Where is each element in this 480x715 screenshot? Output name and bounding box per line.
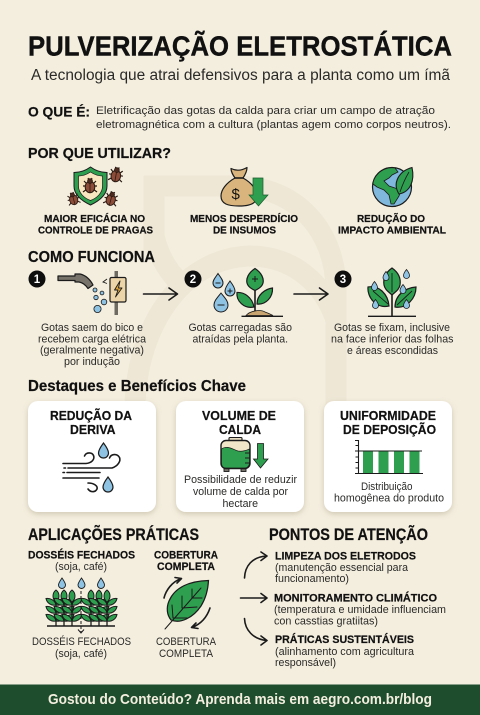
panel: redução da deriva [28, 401, 156, 512]
application: cobertura completa [154, 550, 218, 660]
caption: atraídas pela planta. [192, 334, 288, 346]
icon: globe with leaf [372, 168, 413, 206]
number badge: 2 [190, 274, 196, 286]
card text: Possibilidade de reduzir [184, 474, 297, 486]
card text: volume de calda por [193, 486, 288, 498]
subheading: COMPLETA [157, 561, 215, 573]
label: CONTROLE DE PRAGAS [38, 226, 153, 236]
label: MAIOR EFICÁCIA NO [44, 212, 145, 225]
card title: REDUÇÃO DA [50, 408, 133, 423]
benefit: ambiental [338, 168, 447, 236]
icon: charged drops and plant [213, 268, 283, 316]
card [324, 401, 452, 512]
caption: COBERTURA [156, 636, 217, 648]
subheading [28, 549, 135, 573]
definition text: eletromagnética com a cultura (plantas agem como corpos neutros). [96, 119, 451, 131]
label: IMPACTO AMBIENTAL [338, 226, 447, 236]
watermark logo [135, 186, 336, 430]
card [176, 401, 304, 512]
card [28, 401, 156, 512]
heading: como funciona: COMO FUNCIONA [28, 249, 155, 266]
definition text [96, 105, 451, 131]
arrow: to práticas [244, 618, 267, 645]
number badge: 3 [340, 274, 346, 286]
caption: recebem carga elétrica [38, 334, 146, 346]
icon: leaf with rotating arrows [164, 578, 210, 629]
caption: COMPLETA [159, 648, 214, 660]
card title [340, 408, 436, 437]
card text: hectare [222, 498, 258, 510]
caption: na face inferior das folhas [331, 334, 454, 346]
caption: Gotas se fixam, inclusive [334, 322, 450, 334]
caption: Gotas carregadas são [188, 322, 292, 334]
label: MENOS DESPERDÍCIO [190, 212, 298, 225]
icon: plant with fixed drops [368, 268, 416, 316]
caption [32, 635, 131, 660]
card title: DERIVA [70, 422, 116, 437]
number badge: 1 [34, 274, 41, 286]
benefit: pragas [38, 166, 153, 236]
icon: crop canopy with drops [46, 578, 117, 633]
point: práticas: PRÁTICAS SUSTENTÁVEIS [275, 633, 414, 646]
card title: UNIFORMIDADE [340, 408, 436, 423]
footer text: Gostou do Conteúdo? Aprenda mais em aegro.com.br/blog [48, 691, 432, 708]
card title: VOLUME DE [202, 408, 276, 423]
subheading: COBERTURA [154, 550, 218, 562]
application: dosséis fechados [28, 549, 135, 660]
icon: money bag with arrow: $ [232, 186, 240, 203]
label [338, 212, 447, 236]
point: limpeza [275, 550, 416, 585]
label: DE INSUMOS [213, 226, 276, 236]
point: monitoramento: con casstias gratiitas) [274, 616, 378, 628]
section: o que é [28, 104, 451, 131]
heading: destaques: Destaques e Benefícios Chave [28, 378, 246, 395]
caption [38, 322, 146, 368]
subheading [154, 550, 218, 573]
label: REDUÇÃO DO [357, 212, 425, 225]
card title: CALDA [219, 422, 262, 437]
heading: por que utilizar: POR QUE UTILIZAR? [28, 145, 171, 162]
caption [188, 322, 292, 346]
icon: wind and drops [63, 443, 120, 492]
step 3 [331, 268, 454, 357]
arrow: step 1 to 2 [144, 288, 178, 300]
definition text: Eletrificação das gotas da calda para criar um campo de atração [96, 105, 435, 117]
label: O QUE É: [28, 104, 90, 120]
point: limpeza: funcionamento) [275, 573, 349, 585]
card text: homogênea do produto [334, 492, 444, 504]
label [190, 212, 298, 236]
card text [184, 474, 297, 510]
card text: Distribuição [361, 481, 413, 493]
heading: aplicações práticas: APLICAÇÕES PRÁTICAS [28, 524, 199, 544]
caption: (geralmente negativa) [40, 344, 144, 356]
caption [331, 322, 454, 357]
panel: uniformidade [324, 401, 452, 512]
point: limpeza: (manutenção essencial para [275, 562, 408, 574]
benefit: insumos [190, 168, 298, 236]
icon: shield and bugs [66, 166, 124, 207]
panel: volume de calda [176, 401, 304, 512]
card text [334, 481, 444, 504]
subheading: DOSSÉIS FECHADOS [28, 549, 135, 562]
step 2 [184, 268, 292, 346]
caption: por indução [64, 356, 120, 368]
caption: e áreas escondidas [347, 345, 439, 357]
heading: pontos de atenção: PONTOS DE ATENÇÃO [269, 524, 428, 544]
point: monitoramento [274, 592, 446, 628]
caption: Gotas saem do bico e [41, 322, 143, 334]
card title [202, 408, 276, 437]
step 1 [28, 270, 146, 368]
arrow: to limpeza [244, 552, 267, 578]
point: limpeza: LIMPEZA DOS ELETRODOS [275, 550, 416, 562]
arrow: to monitoramento [240, 594, 267, 602]
card title [50, 408, 133, 437]
point: práticas: (alinhamento com agricultura [275, 646, 414, 658]
point: monitoramento: MONITORAMENTO CLIMÁTICO [274, 592, 437, 605]
bar chart: uniform deposition [355, 440, 423, 474]
card title: DE DEPOSIÇÃO [343, 422, 436, 437]
caption: DOSSÉIS FECHADOS [32, 635, 131, 648]
arrow: step 2 to 3 [294, 288, 328, 300]
point: práticas: responsável) [275, 657, 336, 669]
caption: (soja, café) [55, 648, 107, 660]
point: monitoramento: (temperatura e umidade influenciam [274, 604, 446, 616]
subheading: (soja, café) [55, 561, 107, 573]
icon: tank with down arrow [221, 438, 268, 472]
caption [156, 636, 217, 660]
footer [0, 684, 480, 715]
title: PULVERIZAÇÃO ELETROSTÁTICA [28, 30, 452, 62]
point: práticas [275, 633, 414, 669]
subtitle: A tecnologia que atrai defensivos para a planta como um ímã [31, 67, 450, 84]
label [38, 212, 153, 236]
icon: nozzle and charge box [58, 271, 126, 315]
